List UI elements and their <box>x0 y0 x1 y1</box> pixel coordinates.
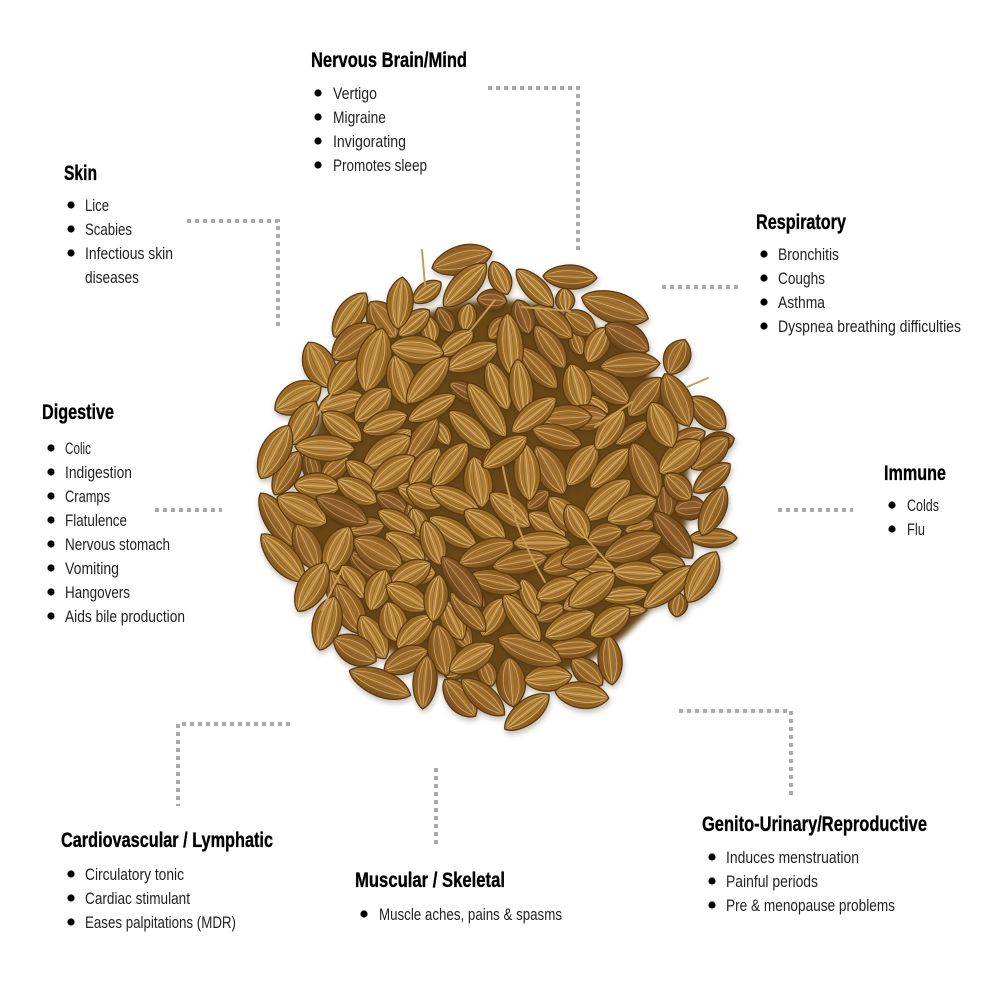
list: genito-urinary items: Induces menstruation <box>726 848 859 867</box>
heading: cardiovascular: Cardiovascular / Lymphatic <box>61 829 273 852</box>
list: respiratory items: Asthma <box>778 293 825 312</box>
list: cardiovascular items: Circulatory tonic <box>85 865 184 884</box>
connector: genito-urinary <box>679 711 791 795</box>
list: muscular items: Muscle aches, pains & spasms <box>379 905 562 924</box>
panel: skin <box>64 162 173 287</box>
connector: skin <box>187 221 278 326</box>
heading: nervous brain/mind: Nervous Brain/Mind <box>311 49 467 72</box>
seed pile photo <box>248 238 737 739</box>
heading: skin: Skin <box>64 162 97 185</box>
panel: digestive <box>42 401 185 626</box>
list: respiratory items: Coughs <box>778 269 825 288</box>
list: cardiovascular items: Cardiac stimulant <box>85 889 190 908</box>
panel: respiratory <box>756 211 961 336</box>
list: digestive items: Vomiting <box>65 559 119 578</box>
list: nervous items: Promotes sleep <box>333 156 427 175</box>
list: digestive items <box>47 439 185 626</box>
list: cardiovascular items <box>67 865 236 932</box>
list: skin items: diseases <box>85 268 139 287</box>
panel: genito-urinary/reproductive <box>702 813 927 915</box>
panel: immune <box>884 462 946 539</box>
list: skin items: Scabies <box>85 220 132 239</box>
list: digestive items: Nervous stomach <box>65 535 170 554</box>
list: digestive items: Cramps <box>65 487 110 506</box>
list: immune items: Colds <box>907 496 939 515</box>
connector: immune <box>778 508 853 512</box>
heading: immune: Immune <box>884 462 946 485</box>
list: digestive items: Indigestion <box>65 463 132 482</box>
connector: respiratory <box>662 285 738 289</box>
list: nervous items: Invigorating <box>333 132 406 151</box>
list: skin items: Lice <box>85 196 109 215</box>
list: genito-urinary items <box>708 848 895 915</box>
list: cardiovascular items: Eases palpitations (MDR) <box>85 913 236 932</box>
heading: respiratory: Respiratory <box>756 211 846 234</box>
list: respiratory items <box>760 245 961 336</box>
list: digestive items: Hangovers <box>65 583 130 602</box>
connector: muscular <box>434 768 438 848</box>
heading: genito-urinary: Genito-Urinary/Reproductive <box>702 813 927 836</box>
list: nervous items <box>314 84 427 175</box>
connector: nervous <box>488 88 578 252</box>
heading: muscular: Muscular / Skeletal <box>355 869 505 892</box>
list: nervous items: Vertigo <box>333 84 377 103</box>
list: digestive items: Aids bile production <box>65 607 185 626</box>
list: digestive items: Flatulence <box>65 511 127 530</box>
connector: cardiovascular <box>178 724 290 806</box>
panel: cardiovascular / lymphatic <box>61 829 273 932</box>
panel: muscular / skeletal <box>355 869 562 924</box>
list: immune items: Flu <box>907 520 925 539</box>
list: digestive items: Colic <box>65 439 91 458</box>
list: respiratory items: Dyspnea breathing difficulties <box>778 317 961 336</box>
list: nervous items: Migraine <box>333 108 386 127</box>
list: skin items <box>67 196 173 287</box>
panel: nervous brain/mind <box>311 49 467 175</box>
connector: digestive <box>155 508 222 512</box>
list: skin items: Infectious skin <box>85 244 173 263</box>
list: genito-urinary items: Painful periods <box>726 872 818 891</box>
list: immune items <box>888 496 939 539</box>
list: respiratory items: Bronchitis <box>778 245 839 264</box>
heading: digestive: Digestive <box>42 401 114 424</box>
list: genito-urinary items: Pre & menopause problems <box>726 896 895 915</box>
